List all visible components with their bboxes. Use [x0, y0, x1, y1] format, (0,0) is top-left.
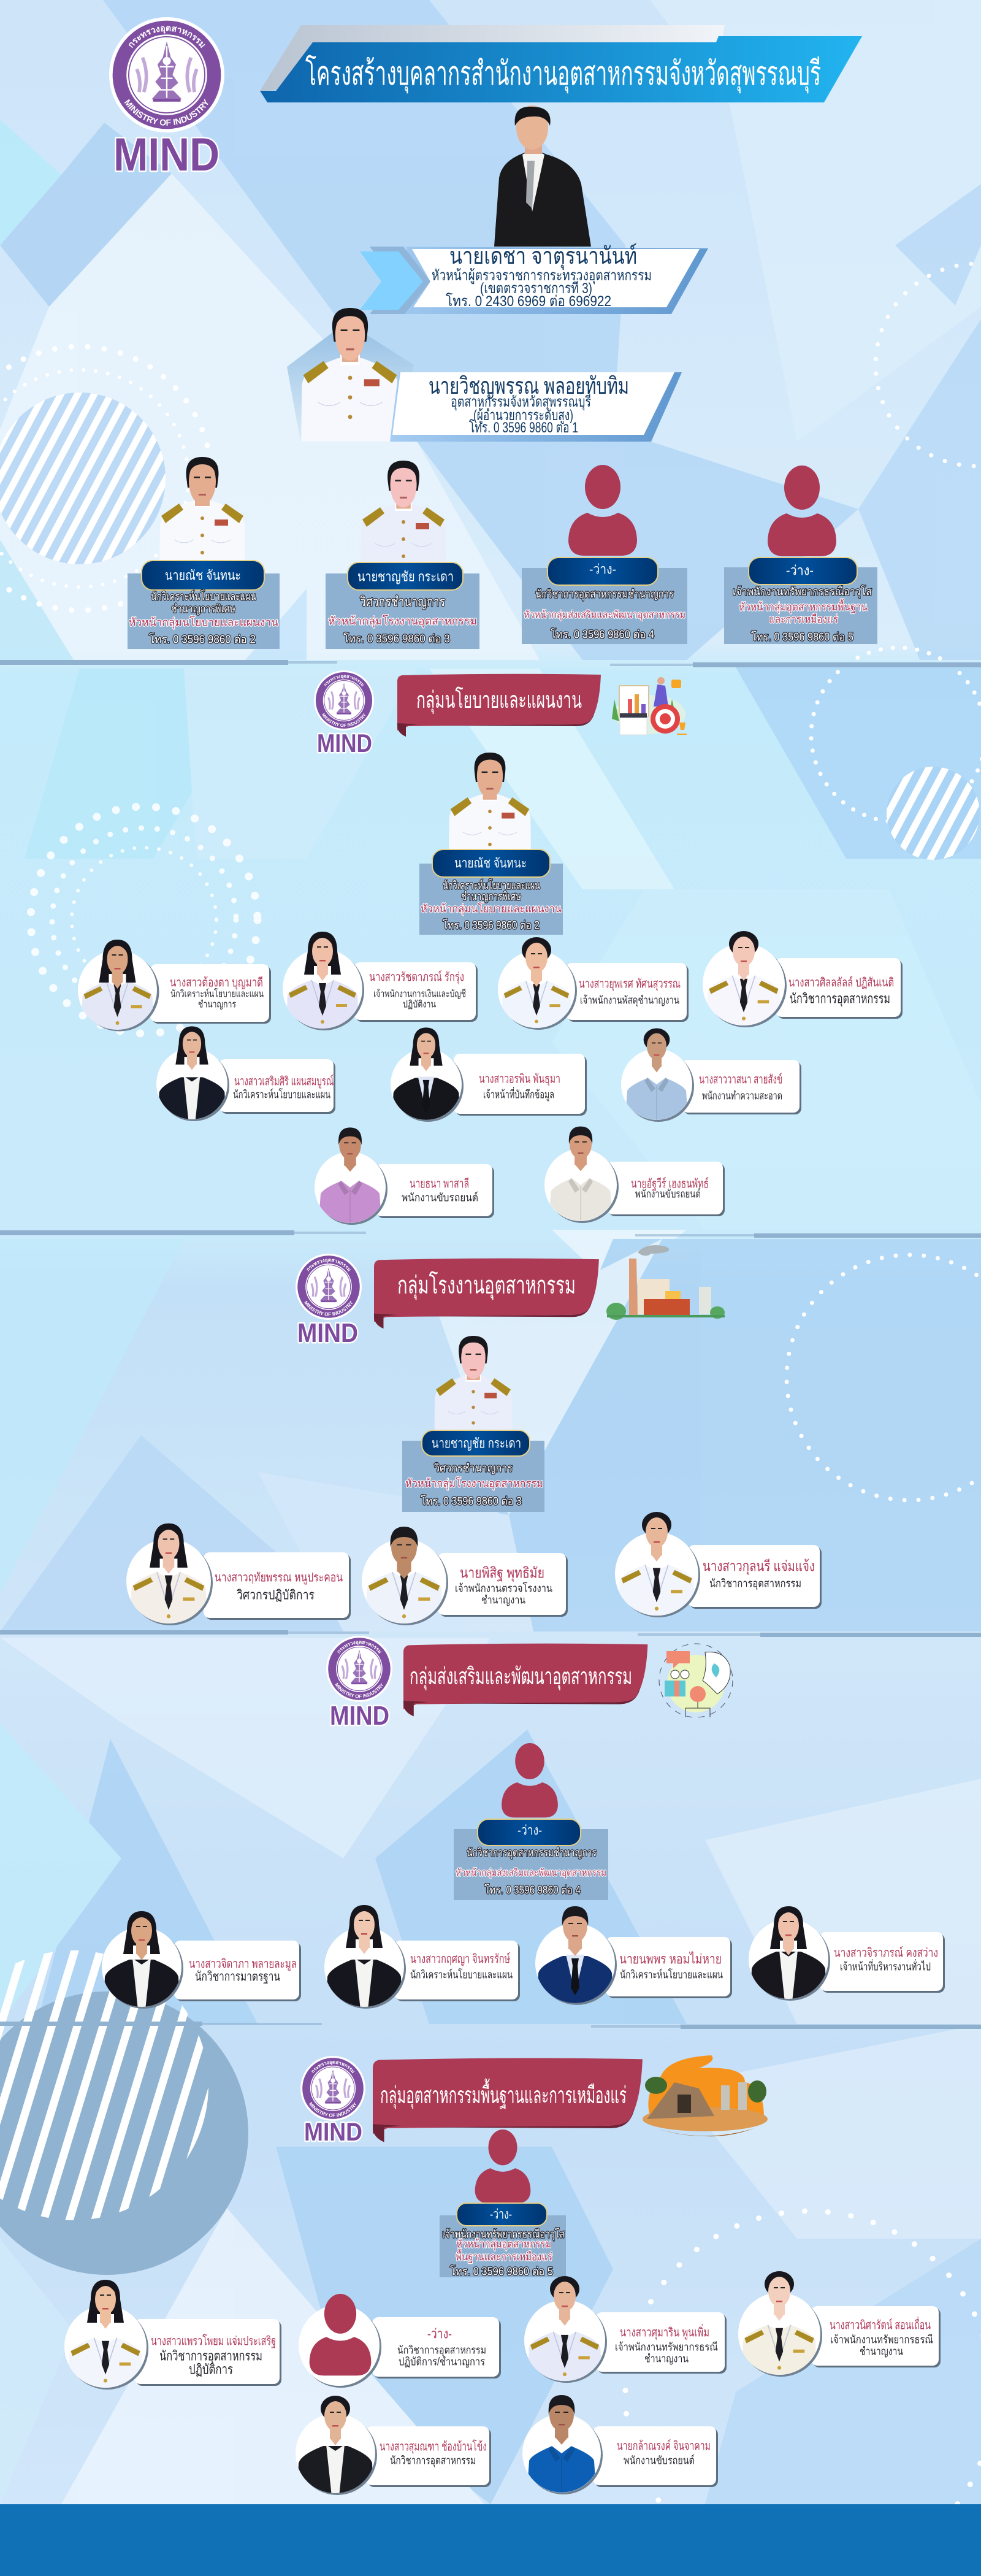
staff card: Atthawee: นายอัฐวีร์ เฮงธนพัทธ์ [631, 1176, 709, 1191]
group head: vacant basic industries: หัวหน้ากลุ่มอุตสาหกรรม [456, 2237, 551, 2251]
group head: vacant promotion [454, 1743, 608, 1900]
section banner: factories: กลุ่มโรงงานอุตสาหกรรม [397, 1271, 576, 1300]
inspection zone: (เขตตรวจราชการที่ 3) [480, 278, 592, 297]
staff card: Soemsiri: นางสาวเสริมศิริ แผนสมบูรณ์ [234, 1075, 334, 1089]
section logo: policy: กระทรวงอุตสาหกรรม [324, 675, 364, 687]
staff card: Yupares: เจ้าพนักงานพัสดุชำนาญงาน [580, 994, 679, 1007]
staff card: Nisarat: นางสาวนิศารัตน์ สอนเถื่อน [830, 2316, 931, 2332]
section banner: factories [374, 1259, 599, 1328]
staff card: Pruetiphan: นางสาวฤทัยพรรณ หนูประคอน [215, 1571, 343, 1585]
staff card: Nisarat: เจ้าพนักงานทรัพยากรธรณี [830, 2333, 933, 2345]
group head: vacant basic industries [440, 2129, 566, 2278]
group head: policy and planning [128, 457, 280, 649]
staff card: Sumontha: นางสาวสุมณฑา ช้องบ้านโข้ง [380, 2440, 487, 2455]
role: หัวหน้าผู้ตรวจราชการกระทรวงอุตสาหกรรม [432, 267, 652, 285]
staff card: Kunlasri: นางสาวกุลนรี แจ่มแจ้ง [703, 1558, 815, 1575]
staff card: Pruetiphan [126, 1524, 351, 1627]
main logo: Ministry of Industry: กระทรวงอุตสาหกรรม [129, 26, 205, 48]
staff card: Soemsiri [156, 1026, 335, 1122]
staff card: Wasana: พนักงานทำความสะอาด [702, 1089, 782, 1102]
group head: vacant promotion: -ว่าง- [589, 562, 616, 577]
group head: vacant promotion: นักวิชาการอุตสาหกรรมชำนาญการ [467, 1846, 597, 1860]
staff card: Sillalak: นางสาวศิลลลัลล์ ปฏิสันเนติ [788, 975, 894, 990]
group lead: policy and planning: หัวหน้ากลุ่มนโยบายและแผนงาน [421, 902, 562, 915]
staff card: Sumontha: นักวิชาการอุตสาหกรรม [390, 2455, 476, 2467]
staff card: Klanarong [522, 2395, 718, 2496]
staff card: Jidapa: นักวิชาการมาตรฐาน [195, 1970, 280, 1984]
section logo: basic industries: กระทรวงอุตสาหกรรม [311, 2061, 354, 2073]
staff card: Phisit: ชำนาญงาน [481, 1593, 525, 1606]
section banner: promotion and development: กลุ่มส่งเสริมและพัฒนาอุตสาหกรรม [410, 1664, 632, 1690]
staff card: Jidapa: นางสาวจิดาภา พลายละมูล [189, 1958, 297, 1971]
staff card: Atthawee [544, 1127, 725, 1224]
staff card: Sillalak [703, 931, 903, 1029]
staff card: Phraewphloem [64, 2280, 281, 2391]
section wordmark: factories: MIND [297, 1318, 358, 1348]
staff card: Wasana: นางสาววาสนา สายสังข์ [699, 1072, 782, 1087]
staff card: Kritsanya: นางสาวกฤศญา จินทรรักษ์ [410, 1952, 510, 1966]
staff card: Klanarong: นายกล้าณรงค์ จินจาคาม [617, 2439, 711, 2453]
main logo wordmark: MIND [113, 129, 219, 181]
staff card: vacant technical officer: นักวิชาการอุตสาหกรรม [397, 2344, 486, 2356]
staff card: Thana: พนักงานขับรถยนต์ [402, 1191, 478, 1203]
group head: policy and planning: นายณัช จันทนะ [165, 568, 241, 583]
footer band [0, 2504, 981, 2576]
section banner: policy and planning: กลุ่มนโยบายและแผนงาน [416, 686, 582, 714]
role: อุตสาหกรรมจังหวัดสุพรรณบุรี [451, 394, 591, 411]
staff card: Tongta: ชำนาญการ [198, 1000, 236, 1010]
name: นายเดชา จาตุรนานันท์ [449, 243, 637, 270]
icon: mining island [643, 2055, 768, 2136]
staff card: vacant technical officer [299, 2294, 501, 2388]
staff card: Phraewphloem: ปฏิบัติการ [189, 2361, 233, 2377]
group head: vacant basic industries: เจ้าพนักงานทรัพยากรธรณีอาวุโส [733, 585, 872, 599]
staff card: Sumarin: นางสาวศุมาริน พูนเพิ่ม [620, 2323, 709, 2340]
staff card: Onphin: นางสาวอรพิน พันธุมา [479, 1072, 560, 1087]
staff card: Soemsiri: นักวิเคราะห์นโยบายและแผน [233, 1088, 330, 1100]
icon: planning target [612, 677, 687, 735]
staff card: Sumarin: เจ้าพนักงานทรัพยากรธรณี [615, 2340, 718, 2353]
name panel: provincial director [390, 372, 682, 442]
section logo: factories: กระทรวงอุตสาหกรรม [307, 1259, 351, 1271]
staff card: Atthawee: พนักงานขับรถยนต์ [635, 1187, 701, 1200]
staff card: Phraewphloem: นักวิชาการอุตสาหกรรม [159, 2348, 262, 2364]
staff card: Ratchadaporn: เจ้าพนักงานการเงินและบัญชี [373, 989, 466, 1000]
staff card: Nisarat [738, 2271, 941, 2378]
name panel: inspector general [360, 243, 708, 314]
section wordmark: promotion: MIND [330, 1701, 389, 1731]
main logo: Ministry of Industry: MINISTRY OF INDUSTRY [124, 99, 208, 126]
section logo: factories: MINISTRY OF INDUSTRY [304, 1300, 353, 1316]
photo: inspector general in black suit [494, 105, 591, 247]
group lead: factories: โทร. 0 3596 9860 ต่อ 3 [421, 1494, 522, 1508]
group head: vacant promotion [522, 465, 687, 644]
group head: policy and planning: โทร. 0 3596 9860 ต่อ 2 [149, 633, 256, 645]
group lead: factories: วิศวกรชำนาญการ [434, 1462, 513, 1474]
group lead: policy and planning: นายณัช จันทนะ [454, 855, 527, 871]
section logo: factories [296, 1254, 362, 1320]
group head: vacant promotion: โทร. 0 3596 9860 ต่อ 4 [484, 1883, 581, 1896]
section banner: basic industries and mining [373, 2058, 643, 2142]
staff card: vacant technical officer: ปฏิบัติการ/ชำนาญการ [399, 2355, 485, 2367]
section logo: promotion: MINISTRY OF INDUSTRY [335, 1683, 383, 1698]
staff card: Noppadon: นายนพพร หอมไม่หาย [619, 1952, 722, 1966]
section wordmark: basic industries: MIND [304, 2117, 362, 2146]
group head: vacant basic industries: และการเหมืองแร่ [769, 613, 838, 626]
phone: โทร. 0 3596 9860 ต่อ 1 [469, 419, 578, 436]
staff card: Phraewphloem: นางสาวแพรวโพยม แจ่มประเสริฐ [151, 2334, 276, 2348]
rank: (ผู้อำนวยการระดับสูง) [473, 407, 573, 424]
group lead: factories: หัวหน้ากลุ่มโรงงานอุตสาหกรรม [405, 1477, 543, 1490]
staff card: Kritsanya: นักวิเคราะห์นโยบายและแผน [410, 1968, 513, 1981]
group head: vacant basic industries: เจ้าพนักงานทรัพยากรธรณีอาวุโส [442, 2228, 565, 2241]
staff card: Ratchadaporn: นางสาวรัชดาภรณ์ รักรุ่ง [369, 970, 464, 985]
icon: people development [659, 1644, 733, 1717]
staff card: Sillalak: นักวิชาการอุตสาหกรรม [790, 991, 890, 1007]
group head: vacant promotion: หัวหน้ากลุ่มส่งเสริมและพัฒนาอุตสาหกรรม [456, 1867, 606, 1879]
divider 4 [0, 2022, 981, 2029]
staff card: Wasana [621, 1028, 801, 1122]
name: นายวิชญพรรณ พลอยทับทิม [429, 374, 629, 399]
group head: factories: หัวหน้ากลุ่มโรงงานอุตสาหกรรม [328, 615, 477, 628]
staff card: Tongta: นักวิเคราะห์นโยบายและแผน [170, 987, 264, 1000]
staff card: Tongta: นางสาวต้องตา บุญมาดี [170, 976, 263, 990]
group head: vacant basic industries: หัวหน้ากลุ่มอุตสาหกรรมพื้นฐาน [739, 599, 868, 613]
staff card: Phisit: นายพิสิฐ พุทธิมัย [460, 1565, 544, 1582]
group head: vacant basic industries: โทร. 0 3596 9860 ต่อ 5 [450, 2264, 553, 2278]
main logo: Ministry of Industry [109, 17, 224, 132]
group head: vacant promotion: โทร. 0 3596 9860 ต่อ 4 [551, 628, 654, 640]
group head: factories [326, 461, 479, 649]
staff card: Phisit [362, 1527, 568, 1627]
section banner: promotion and development [403, 1644, 647, 1716]
group head: vacant basic industries: โทร. 0 3596 9860 ต่อ 5 [751, 631, 853, 643]
staff card: Onphin [391, 1027, 587, 1122]
section logo: policy [314, 670, 374, 730]
staff card: Kritsanya [324, 1905, 520, 2010]
group head: vacant basic industries: -ว่าง- [786, 563, 814, 578]
staff card: Jidapa [102, 1911, 301, 2010]
group head: factories: นายชาญชัย กระเดา [357, 569, 454, 584]
title banner [260, 25, 862, 102]
staff card: Phisit: เจ้าพนักงานตรวจโรงงาน [455, 1581, 552, 1595]
section banner: basic industries and mining: กลุ่มอุตสาหกรรมพื้นฐานและการเหมืองแร่ [380, 2078, 627, 2109]
group lead: policy and planning: นักวิเคราะห์นโยบายและแผน [443, 878, 540, 892]
section logo: policy: MINISTRY OF INDUSTRY [321, 713, 365, 727]
divider 2 [0, 1230, 981, 1238]
divider 3 [0, 1630, 981, 1637]
staff card: Kunlasri: นักวิชาการอุตสาหกรรม [709, 1577, 801, 1590]
staff card: Thana: นายธนา พาสาลี [410, 1178, 469, 1191]
group head: vacant basic industries: พื้นฐานและการเหมืองแร่ [456, 2248, 552, 2263]
group lead: factories [402, 1336, 544, 1512]
section logo: promotion: กระทรวงอุตสาหกรรม [337, 1641, 381, 1654]
group lead: policy and planning: โทร. 0 3596 9860 ต่อ 2 [443, 919, 540, 931]
staff card: Thana [315, 1127, 494, 1225]
group head: policy and planning: หัวหน้ากลุ่มนโยบายและแผนงาน [129, 616, 278, 629]
staff card: Jiraporn: เจ้าหน้าที่บริหารงานทั่วไป [840, 1959, 931, 1972]
staff card: Noppadon [535, 1906, 732, 2006]
staff card: Nisarat: ชำนาญงาน [860, 2345, 903, 2358]
icon: factory [606, 1245, 725, 1320]
staff card: Yupares [498, 937, 689, 1031]
staff card: Pruetiphan: วิศวกรปฏิบัติการ [237, 1589, 315, 1602]
staff card: Ratchadaporn [283, 932, 478, 1032]
staff card: Kunlasri [615, 1512, 822, 1619]
staff card: Tongta [78, 940, 271, 1033]
staff card: Ratchadaporn: ปฏิบัติงาน [403, 1000, 436, 1010]
staff card: Sumontha [296, 2396, 491, 2496]
staff card: Sumarin [524, 2276, 727, 2384]
staff card: Noppadon: นักวิเคราะห์นโยบายและแผน [620, 1968, 723, 1981]
staff card: Yupares: นางสาวยุพเรศ ทัศนสุวรรณ [579, 978, 681, 991]
staff card: Klanarong: พนักงานขับรถยนต์ [624, 2455, 695, 2467]
phone: โทร. 0 2430 6969 ต่อ 696922 [446, 293, 611, 310]
group lead: factories: นายชาญชัย กระเดา [432, 1435, 521, 1451]
group head: policy and planning: นักวิเคราะห์นโยบายและแผน [151, 590, 256, 602]
staff card: Sumarin: ชำนาญงาน [644, 2353, 689, 2365]
staff card: Jiraporn [749, 1906, 945, 2002]
section wordmark: policy: MIND [317, 729, 372, 757]
section banner: policy and planning [397, 674, 601, 737]
section logo: basic industries [300, 2056, 365, 2121]
group head: factories: วิศวกรชำนาญการ [359, 594, 445, 610]
group head: vacant promotion: นักวิชาการอุตสาหกรรมชำนาญการ [535, 588, 674, 601]
group head: vacant promotion: หัวหน้ากลุ่มส่งเสริมและพัฒนาอุตสาหกรรม [524, 610, 685, 621]
section logo: basic industries: MINISTRY OF INDUSTRY [309, 2102, 357, 2117]
staff card: Onphin: เจ้าหน้าที่บันทึกข้อมูล [483, 1087, 554, 1102]
group lead: policy and planning: ชำนาญการพิเศษ [461, 891, 521, 903]
group head: factories: โทร. 0 3596 9860 ต่อ 3 [343, 632, 450, 645]
group lead: policy and planning [419, 753, 563, 935]
group head: vacant promotion: -ว่าง- [517, 1823, 542, 1838]
group head: vacant basic industries [724, 466, 877, 644]
photo: provincial director [287, 308, 414, 442]
staff card: Jiraporn: นางสาวจิราภรณ์ คงสว่าง [834, 1945, 938, 1960]
staff card: vacant technical officer: -ว่าง- [427, 2326, 452, 2342]
group head: vacant basic industries: -ว่าง- [490, 2207, 512, 2221]
divider 1 [0, 660, 981, 667]
group head: policy and planning: ชำนาญการพิเศษ [171, 602, 235, 615]
section logo: promotion [326, 1636, 392, 1702]
